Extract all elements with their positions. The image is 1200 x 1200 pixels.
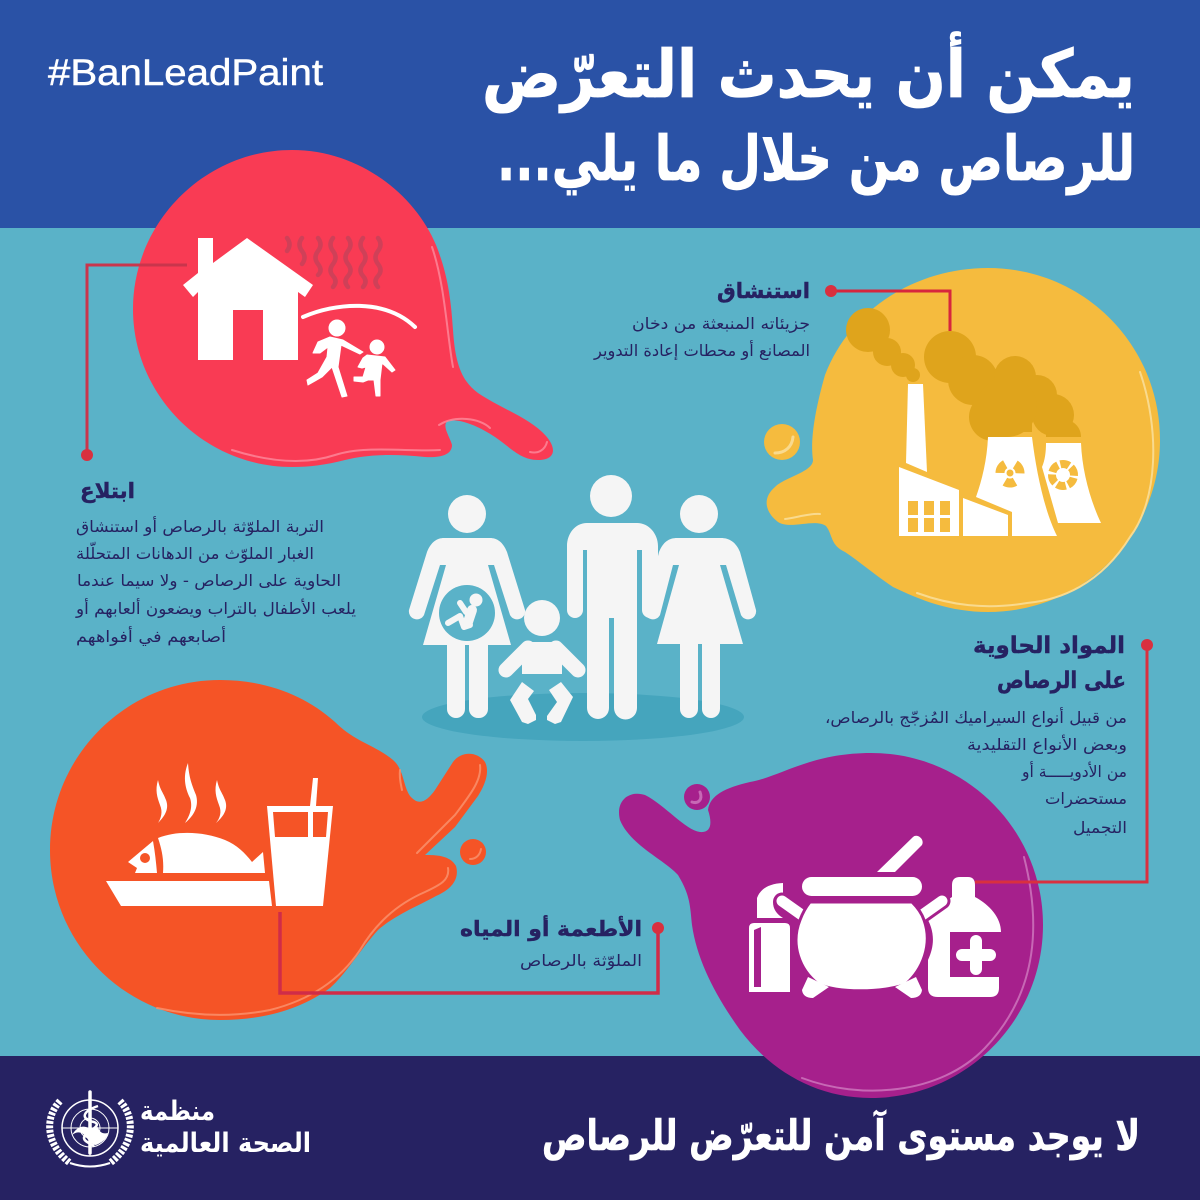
text: inhalation — [593, 279, 810, 361]
man head — [590, 475, 632, 517]
icon: plate — [106, 881, 272, 906]
icon: fish — [128, 833, 265, 873]
text: ingestion: التربة الملوّثة بالرصاص أو استنشاق — [76, 516, 324, 537]
connector: lead products — [975, 639, 1153, 882]
WHO emblem — [50, 1092, 130, 1166]
header band — [0, 0, 1200, 228]
text: food or water — [460, 914, 642, 971]
text: ingestion: الغبار الملوّث من الدهانات المتحلّلة — [76, 540, 314, 564]
icon: recycle symbol — [1050, 462, 1076, 488]
WHO name: الصحة العالمية — [140, 1128, 311, 1159]
purple blob — [619, 753, 1043, 1098]
text: ingestion: الحاوية على الرصاص - ولا سيما عندما — [77, 571, 341, 591]
text: lead products: وبعض الأنواع التقليدية — [967, 734, 1127, 755]
icon: spray bottle — [749, 883, 790, 992]
icon: smoke — [846, 308, 1081, 441]
figure: pregnant woman — [409, 495, 525, 718]
WHO name — [140, 1096, 311, 1159]
icon: house — [183, 238, 313, 360]
icon: running adult and child — [307, 320, 395, 397]
text: ingestion: ابتلاع — [80, 479, 135, 503]
icon: factory — [899, 384, 1101, 536]
text: lead products: مستحضرات — [1045, 789, 1127, 809]
yellow blob — [767, 268, 1160, 612]
text: ingestion: أصابعهم في أفواههم — [76, 626, 226, 647]
hashtag: #BanLeadPaint — [48, 52, 324, 93]
family illustration — [409, 475, 756, 741]
text: ingestion: يلعب الأطفال بالتراب ويضعون ألعابهم أو — [75, 598, 356, 619]
panel: food blob — [50, 680, 487, 1020]
factory windows — [908, 501, 950, 532]
figure: man — [567, 523, 658, 720]
figure: baby — [506, 600, 578, 724]
text: inhalation: المصانع أو محطات إعادة التدوير — [593, 340, 810, 361]
title: يمكن أن يحدث التعرّض — [482, 31, 1135, 113]
blob highlights — [775, 372, 1153, 606]
panel: inhalation blob — [764, 268, 1160, 612]
connector: ingestion — [81, 265, 187, 461]
icon: radiation symbol — [996, 459, 1024, 487]
blob highlights — [157, 765, 481, 1015]
orange blob — [50, 680, 487, 1020]
text: inhalation: استنشاق — [717, 279, 810, 303]
blob highlights — [692, 792, 1033, 1091]
text: lead products: من قبيل أنواع السيراميك المُزجّج بالرصاص، — [825, 707, 1127, 728]
figure: woman — [645, 495, 756, 718]
WHO name: منظمة — [140, 1096, 215, 1127]
title — [482, 31, 1135, 196]
droplet — [460, 839, 486, 865]
text: lead products: من الأدويـــــة أو — [1021, 761, 1127, 782]
text: food or water: الملوّثة بالرصاص — [520, 951, 642, 971]
text: lead products: على الرصاص — [997, 668, 1126, 694]
droplet — [764, 424, 800, 460]
ground shadow — [422, 693, 744, 741]
panel: ingestion blob — [133, 150, 553, 467]
icon: fumes — [287, 238, 380, 287]
connector: food — [280, 912, 664, 993]
icon: cup with straw — [267, 778, 333, 906]
text: lead products: المواد الحاوية — [973, 633, 1125, 659]
icon: steam — [157, 763, 226, 823]
icon: medicine bottle — [925, 877, 1001, 997]
panel: lead products blob — [619, 753, 1043, 1098]
icon: cooking pot — [782, 836, 942, 998]
red blob — [133, 150, 553, 467]
connector: inhalation — [825, 285, 950, 331]
text: lead products — [825, 633, 1127, 837]
icon: ground arc — [303, 306, 415, 327]
blob highlights — [232, 247, 547, 461]
text: ingestion — [75, 479, 356, 647]
text: lead products: التجميل — [1073, 818, 1127, 837]
fetus — [448, 594, 482, 627]
text: inhalation: جزيئاته المنبعثة من دخان — [632, 314, 810, 334]
text: food or water: الأطعمة أو المياه — [460, 914, 642, 941]
footer band — [0, 1056, 1200, 1200]
droplet — [684, 784, 710, 810]
